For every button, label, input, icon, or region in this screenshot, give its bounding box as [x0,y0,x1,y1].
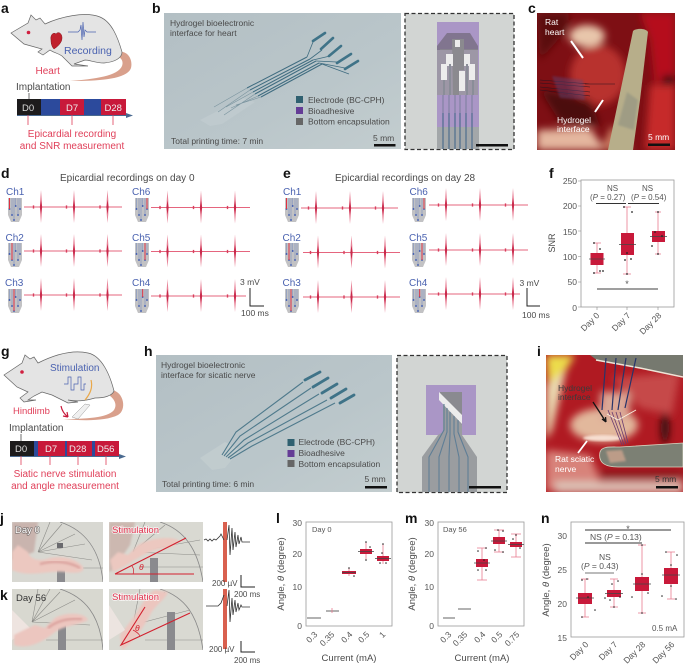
panel g: sciatic stimulation schematic [1,343,126,492]
timeline: D0 [15,444,27,455]
trace Ch5 [409,233,528,267]
significance annotations: NS [642,184,653,193]
scale bar: 5 mm [364,474,386,484]
legend: Bioadhesive [298,448,345,458]
device description: interface for heart [170,28,237,38]
trace Ch3 [5,278,122,313]
x labels: Day 28 [621,639,648,665]
printing time: Total printing time: 6 min [162,479,254,489]
legend: Electrode (BC-CPH) [308,95,385,105]
scale bar [648,132,670,146]
panel n: angle over days at 0.5 mA: 25 [558,565,567,575]
device description: Hydrogel bioelectronic [161,360,246,370]
x labels: Day 7 [610,310,633,333]
legend: Bottom encapsulation [298,459,381,469]
significance annotations: (P = 0.43) [581,561,619,571]
label hydrogel interface: interface [558,392,591,402]
scale bar: 3 mV [240,277,260,287]
arrow [578,441,587,453]
timeline: D7 [45,444,57,455]
box Day 28 [650,211,667,255]
panel i: rat sciatic surgical photo [537,343,683,493]
significance annotations: NS [599,552,611,562]
label hydrogel interface: interface [557,124,590,134]
panel l: angle vs current day 0: 10 [293,582,302,592]
scale bar: 200 µV [212,579,238,588]
scale bar: 200 ms [234,656,260,665]
stimulation waveform [64,377,86,390]
heart label: Heart [36,66,60,77]
device description: interface for sicatic nerve [161,370,256,380]
inset: heart device top view [405,14,514,150]
panel l: angle vs current day 0 [276,510,392,664]
timeline: D7 [66,103,78,114]
x labels: 0.3 [438,629,454,645]
panel m: angle vs current day 56: 0 [429,621,434,631]
panel n: angle over days at 0.5 mA [541,510,684,665]
panel d: epicardial recordings day 0: d [1,165,10,181]
panel h: sciatic hydrogel device photo: h [144,343,153,359]
panel i: rat sciatic surgical photo: i [537,343,541,359]
legend: Bioadhesive [308,106,355,116]
photo during stimulation: θ [139,562,144,572]
trace Ch2 [282,233,400,268]
panel l: angle vs current day 0: Day 0 [312,525,332,534]
panel n: angle over days at 0.5 mA: 15 [558,633,567,643]
x labels: 0.5 [356,629,372,645]
legend [296,95,390,126]
panel l: angle vs current day 0: l [276,510,280,526]
panel c: rat heart surgical photo: c [528,0,536,16]
photo before stimulation [12,522,103,582]
x labels: 0.35 [318,629,337,648]
label rat heart: Rat [545,17,559,27]
icon: heart [51,33,62,49]
timeline caption: Epicardial recording [28,129,116,140]
photo before stimulation [12,589,103,650]
timeline caption: and angle measurement [11,481,119,492]
trace Ch6 [410,187,528,222]
trace Ch3: Ch3 [5,278,24,289]
box Day 0 [589,242,605,274]
significance annotations [581,524,678,633]
timeline caption [20,129,124,152]
label rat heart [545,17,565,37]
x labels [568,639,677,665]
x labels [304,629,388,648]
panel h: sciatic hydrogel device photo [144,343,392,492]
recording waveform [68,22,96,40]
legend: Electrode (BC-CPH) [298,437,375,447]
x labels: 0.4 [339,629,355,645]
photo during stimulation: Stimulation [112,592,159,603]
legend: Bottom encapsulation [308,116,390,126]
timeline [10,434,126,465]
trace Ch6: Ch6 [410,187,428,198]
panel m: angle vs current day 56: 30 [425,518,434,528]
trace Ch4: Ch4 [409,278,428,289]
arrow [593,402,606,422]
x labels: 0.3 [304,629,320,645]
trace Ch5: Ch5 [132,233,151,244]
significance annotations: NS [607,184,618,193]
timeline caption [11,469,119,492]
trace Ch6: Ch6 [132,187,151,198]
timeline: D0 [22,103,34,114]
x labels: 0.75 [503,629,522,648]
panel b: heart hydrogel device photo: b [152,0,161,16]
panel l: angle vs current day 0: 30 [293,518,302,528]
panel m: angle vs current day 56: Day 56 [443,525,467,534]
photo during stimulation [109,589,203,650]
significance annotations: * [625,279,629,289]
panel f: SNR box plot [547,165,674,336]
trace Ch3: Ch3 [282,278,301,289]
trace Ch1: Ch1 [283,187,302,198]
panel e: epicardial recordings day 28 [282,165,550,320]
device description [170,18,255,38]
label hydrogel interface [558,383,592,402]
device printed traces [200,372,354,470]
icon: sciatic nerve [85,380,92,400]
panel m: angle vs current day 56: m [405,510,417,526]
trace Ch5 [132,233,250,268]
trace Ch1 [6,187,122,223]
panel l: angle vs current day 0: 0 [297,621,302,631]
trace Ch4: Ch4 [132,278,151,289]
photo during stimulation: θ [135,623,140,633]
panel m: angle vs current day 56: 20 [425,549,434,559]
x labels: Day 56 [650,639,677,665]
photo during stimulation: Stimulation [112,525,159,536]
device printed traces [200,33,358,126]
timeline: D28 [104,103,122,114]
scale bar: 200 µV [209,645,235,654]
label hydrogel interface: Hydrogel [557,115,591,125]
scale bar [655,474,678,488]
x labels [579,310,664,336]
label hydrogel interface: Hydrogel [558,383,592,393]
arrow [595,100,603,112]
panel g: sciatic stimulation schematic: g [1,343,10,359]
trace Ch6 [132,187,250,224]
axis title: Angle, θ (degree) [276,537,287,611]
axis title: Angle, θ (degree) [407,537,418,611]
arrow [61,406,68,417]
boxes [307,541,391,618]
panel f: SNR box plot: 250 [563,176,577,186]
panel f: SNR box plot: 50 [568,277,577,287]
box Day 7 [619,206,636,275]
panel k: day 56 hindlimb photos [0,587,260,665]
significance annotations [590,184,667,289]
panel l: angle vs current day 0: 20 [293,549,302,559]
scale bar: 5 mm [373,133,394,143]
scale bar [520,278,550,320]
panel k: day 56 hindlimb photos: k [0,587,8,603]
panel c: rat heart surgical photo [528,0,675,150]
significance annotations: 0.5 mA [652,624,678,633]
hindlimb label: Hindlimb [13,406,50,417]
panel b: heart hydrogel device photo [152,0,401,149]
axis title: Current (mA) [322,653,376,664]
recording label: Recording [64,45,112,57]
photo during stimulation [109,522,203,582]
panel n: angle over days at 0.5 mA: 20 [558,599,567,609]
significance annotations: (P = 0.54) [631,193,667,202]
scale bar: 3 mV [520,278,540,288]
icon: rat body [11,15,131,81]
arrow [571,41,583,58]
x labels: 0.4 [472,629,488,645]
trace Ch1: Ch1 [6,187,25,198]
trace Ch4 [409,277,520,313]
scale bar: 100 ms [241,308,269,318]
label rat sciatic nerve: nerve [555,464,577,474]
scale bar: 5 mm [655,474,676,484]
timeline: D28 [69,444,86,455]
scale bar [209,641,260,665]
photo before stimulation: Day 56 [16,593,46,604]
photo before stimulation: Day 0 [15,525,40,536]
heading: Epicardial recordings on day 28 [335,173,476,184]
scale bar: 5 mm [648,132,669,142]
stimulation label: Stimulation [50,363,99,374]
panel n: angle over days at 0.5 mA: n [541,510,550,526]
implantation label: Implantation [16,82,70,93]
device description: Hydrogel bioelectronic [170,18,255,28]
panel f: SNR box plot: 200 [563,201,577,211]
trace Ch3 [282,278,400,313]
implantation label: Implantation [9,423,63,434]
label rat sciatic nerve: Rat sciatic [555,454,595,464]
device description [161,360,256,380]
timeline caption: and SNR measurement [20,141,124,152]
boxes [576,544,680,618]
evoked potential trace [204,522,250,582]
panel e: epicardial recordings day 28: e [283,165,291,181]
x labels: 1 [377,629,388,640]
x labels: Day 28 [637,310,664,336]
label hydrogel interface [557,115,591,134]
scale bar [373,133,396,146]
legend [288,437,381,469]
panel f: SNR box plot: 100 [563,252,577,262]
significance annotations: (P = 0.27) [590,193,626,202]
panel f: SNR box plot: 150 [563,227,577,237]
timeline: D56 [97,444,114,455]
x labels: Day 0 [568,639,591,662]
scale bar: 100 ms [522,310,550,320]
trace Ch2: Ch2 [282,233,301,244]
printing time: Total printing time: 7 min [171,136,263,146]
x labels: 0.5 [489,629,505,645]
panel d: epicardial recordings day 0 [1,165,269,318]
panel j: day 0 hindlimb photos: j [0,510,4,526]
x labels: Day 0 [579,310,602,333]
scale bar [240,277,269,318]
panel n: angle over days at 0.5 mA: 30 [558,531,567,541]
significance annotations: NS (P = 0.13) [590,532,642,542]
trace Ch2 [6,233,122,267]
panel m: angle vs current day 56 [405,510,524,664]
axis title: SNR [547,233,557,253]
heading: Epicardial recordings on day 0 [60,173,195,184]
panel j: day 0 hindlimb photos [0,510,260,599]
boxes [443,529,524,618]
timeline caption: Siatic nerve stimulation [14,469,116,480]
panel f: SNR box plot: 0 [572,303,577,313]
axis title: Current (mA) [455,653,509,664]
timeline [17,93,133,125]
trace Ch4 [132,278,246,313]
trace Ch1 [283,187,398,224]
label rat sciatic nerve [555,454,595,474]
panel a: rat heart implantation schematic [1,0,133,152]
x labels: Day 7 [597,639,620,662]
label rat heart: heart [545,27,565,37]
evoked potential trace [206,589,250,649]
x labels [438,629,522,648]
axis title: Angle, θ (degree) [541,543,552,617]
panel m: angle vs current day 56: 10 [425,582,434,592]
x labels: 0.35 [451,629,470,648]
panel a: rat heart implantation schematic: a [1,0,9,16]
scale bar: 200 ms [234,590,260,599]
scale bar [212,575,260,599]
inset: sciatic device top view [397,356,507,492]
scale bar [364,474,387,488]
significance annotations: * [626,524,630,534]
trace Ch2: Ch2 [6,233,24,244]
panel f: SNR box plot: f [549,165,554,181]
trace Ch5: Ch5 [409,233,428,244]
icon: rat body [4,352,123,420]
